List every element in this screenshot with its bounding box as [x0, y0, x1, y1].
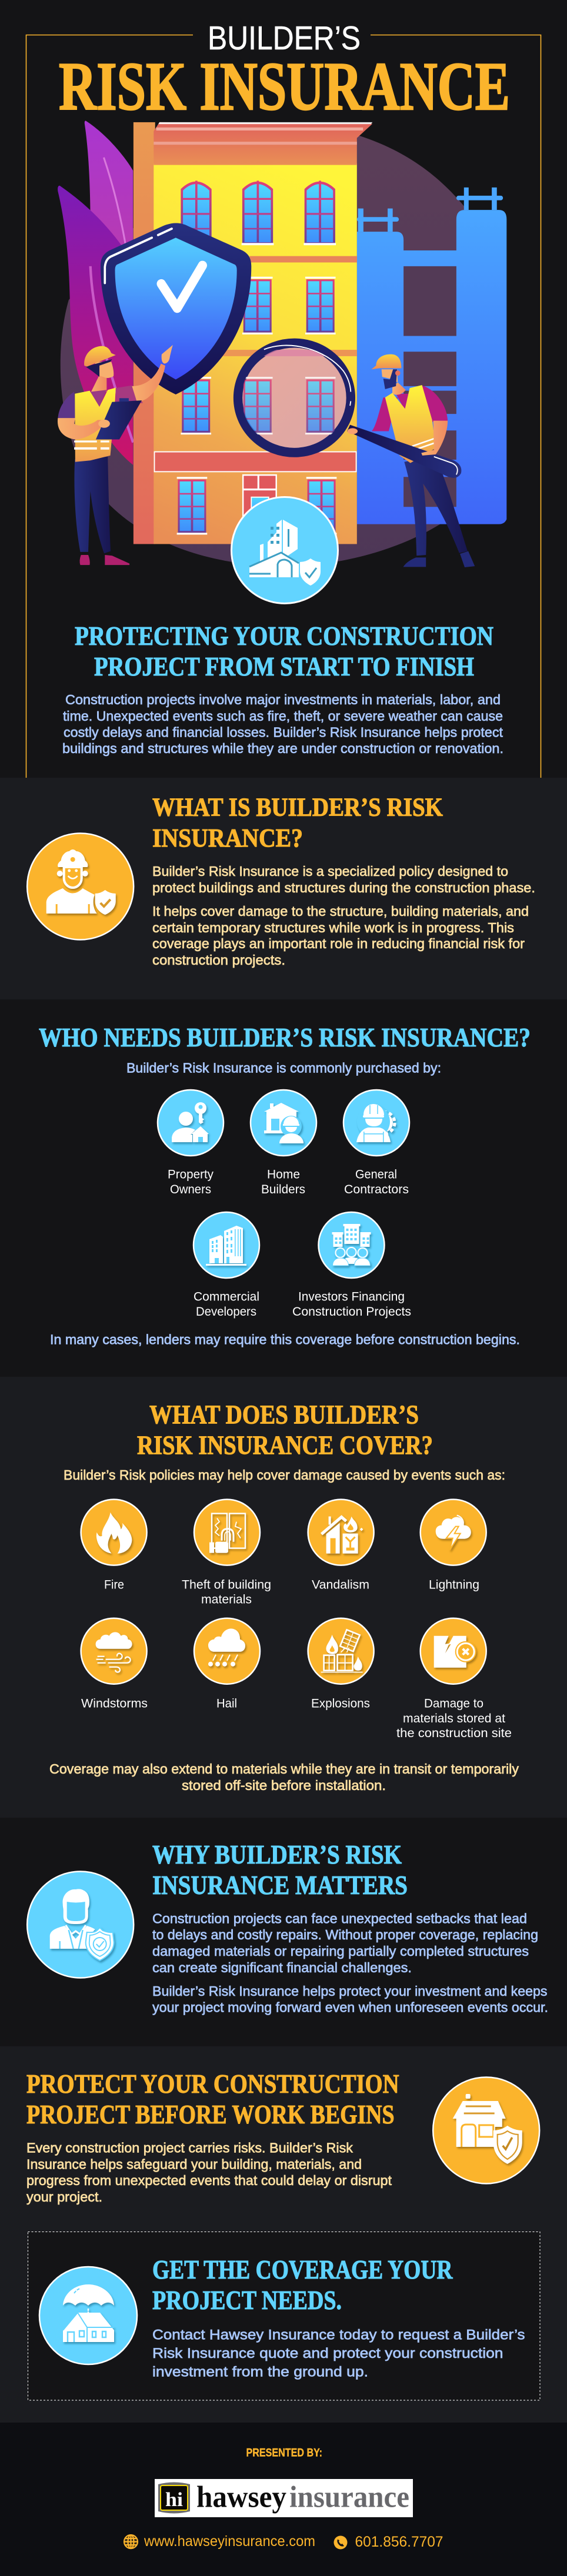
heading: protect your construction project: PROTECT YOUR CONSTRUCTION — [26, 2069, 399, 2099]
text block: intro: buildings and structures while they are under construction or renovation. — [62, 741, 503, 756]
logo: hawsey insurance — [155, 2479, 413, 2517]
label — [182, 1578, 271, 1606]
title — [59, 19, 510, 125]
text block: what is: certain temporary structures while work is in progress. This — [152, 920, 514, 935]
text block: every project — [26, 2140, 392, 2204]
logo mark — [158, 2482, 190, 2514]
logo wordmark: insurance — [289, 2481, 409, 2514]
logo mark: hi — [165, 2489, 183, 2511]
text block: lenders note: In many cases, lenders may require this coverage before construction begins. — [50, 1332, 520, 1347]
item: fire — [81, 1500, 147, 1592]
label: Damage to — [424, 1697, 483, 1711]
label: Developers — [196, 1304, 256, 1319]
label: Owners — [170, 1182, 211, 1196]
item: theft — [182, 1500, 271, 1606]
label: Investors Financing — [298, 1290, 405, 1304]
label — [261, 1167, 305, 1196]
text block: contact — [152, 2327, 525, 2380]
text block: why it matters — [152, 1911, 548, 2015]
leaves — [58, 121, 133, 465]
label: Construction Projects — [292, 1304, 411, 1319]
label: Commercial — [194, 1290, 259, 1304]
heading: what is builder's risk insurance: WHAT IS BUILDER’S RISK — [152, 792, 443, 822]
label: Hail — [216, 1697, 237, 1711]
text block: intro: time. Unexpected events such as fire, theft, or severe weather can cause — [63, 708, 503, 724]
item: general contractors — [343, 1090, 409, 1196]
heading: what does builder's risk insurance cover — [137, 1399, 433, 1460]
text block: coverage extends — [49, 1761, 519, 1793]
item: property owners — [158, 1090, 224, 1196]
text block: intro: costly delays and financial losses. Builder’s Risk Insurance helps protect — [64, 724, 503, 740]
label — [396, 1697, 512, 1740]
heading: protecting your construction project: PROJECT FROM START TO FINISH — [94, 651, 474, 681]
text block: why it matters: your project moving forward even when unforeseen events occur. — [152, 2000, 548, 2015]
label — [168, 1167, 214, 1196]
heading: get the coverage — [152, 2254, 453, 2315]
heading: protect your construction project: PROJECT BEFORE WORK BEGINS — [26, 2099, 394, 2129]
item: lightning — [421, 1500, 486, 1592]
logo wordmark — [196, 2481, 409, 2514]
panel: what is background — [0, 778, 567, 999]
text block: contact: investment from the ground up. — [152, 2364, 368, 2380]
text block: every project: Insurance helps safeguard your building, materials, and — [26, 2156, 362, 2172]
panel: who needs background — [0, 999, 567, 1377]
text block: why it matters: can create significant financial challenges. — [152, 1960, 412, 1975]
icon: buildings and people — [319, 1212, 385, 1278]
label — [344, 1167, 409, 1196]
text block: coverage extends: Coverage may also extend to materials while they are in transit or temporarily — [49, 1761, 519, 1777]
presented by label: PRESENTED BY: — [246, 2447, 322, 2459]
heading: what is builder's risk insurance — [152, 792, 443, 852]
label: Lightning — [429, 1578, 479, 1592]
building — [134, 122, 372, 544]
icon: office buildings — [194, 1212, 259, 1278]
text block: intro — [62, 692, 503, 756]
heading: what does builder's risk insurance cover: WHAT DOES BUILDER’S — [149, 1399, 419, 1429]
worker right — [347, 354, 475, 567]
text block: what is: protect buildings and structures during the construction phase. — [152, 880, 535, 895]
label — [292, 1290, 411, 1319]
icon: professional with shield — [27, 1872, 134, 1978]
heading: get the coverage: PROJECT NEEDS. — [152, 2285, 342, 2315]
hero illustration — [58, 121, 506, 567]
item: commercial developers — [194, 1212, 259, 1319]
panel: intro background — [0, 0, 567, 778]
label: Property — [168, 1167, 214, 1182]
website: www.hawseyinsurance.com — [144, 2533, 315, 2550]
text block: why it matters: damaged materials or repairing partially completed structures — [152, 1943, 529, 1959]
label: Builders — [261, 1182, 305, 1196]
item: vandalism — [308, 1500, 374, 1592]
icon: damaged material panel — [421, 1618, 486, 1684]
heading: why builder's risk insurance matters: WHY BUILDER’S RISK — [152, 1839, 402, 1869]
icon: hand breaking window — [194, 1500, 260, 1565]
text block: coverage extends: stored off-site before installation. — [182, 1778, 386, 1793]
text block: every project: Every construction project carries risks. Builder’s Risk — [26, 2140, 353, 2156]
panel: get the coverage callout — [28, 2232, 540, 2400]
panel: why it matters background — [0, 1818, 567, 2046]
panel: protect background — [0, 2046, 567, 2423]
title frame — [26, 35, 541, 778]
panel: what does it cover background — [0, 1377, 567, 1818]
text block: every project: progress from unexpected events that could delay or disrupt — [26, 2173, 392, 2188]
heading: what is builder's risk insurance: INSURANCE? — [152, 824, 303, 852]
label: materials stored at — [403, 1711, 505, 1725]
magnifying glass lens — [238, 343, 351, 453]
label: Windstorms — [81, 1697, 148, 1711]
label: Explosions — [311, 1697, 370, 1711]
icon: phone — [334, 2536, 347, 2549]
heading: what does builder's risk insurance cover: RISK INSURANCE COVER? — [137, 1430, 433, 1460]
icon: flame — [81, 1500, 147, 1565]
title line: Builder's: BUILDER’S — [208, 19, 361, 57]
text block: what is: construction projects. — [152, 952, 285, 968]
icon: person with key and house — [158, 1090, 224, 1156]
text block: commonly purchased by: Builder’s Risk Insurance is commonly purchased by: — [126, 1060, 441, 1076]
icon: storm cloud with bolt — [421, 1500, 486, 1565]
label: General — [355, 1167, 397, 1182]
logo wordmark: hawsey — [196, 2481, 286, 2514]
phone number: 601.856.7707 — [355, 2534, 443, 2550]
item: explosions — [308, 1618, 374, 1711]
icon: exploding building — [308, 1618, 374, 1684]
label: Fire — [104, 1578, 124, 1592]
text block: events intro: Builder’s Risk policies may help cover damage caused by events such as: — [64, 1467, 505, 1483]
icon: umbrella over house — [39, 2267, 137, 2364]
shield with check — [101, 223, 251, 394]
text block: contact: Contact Hawsey Insurance today to request a Builder’s — [152, 2327, 525, 2343]
label: Vandalism — [312, 1578, 369, 1592]
text block: every project: your project. — [26, 2189, 102, 2204]
item: damage to materials — [396, 1618, 512, 1740]
label: the construction site — [396, 1726, 512, 1740]
icon: house with shield — [433, 2077, 539, 2183]
item: hail — [194, 1618, 260, 1711]
item: investors — [292, 1212, 411, 1319]
text block: why it matters: Construction projects can face unexpected setbacks that lead — [152, 1911, 527, 1926]
heading: protecting your construction project — [75, 621, 493, 681]
heading: why builder's risk insurance matters: INSURANCE MATTERS — [152, 1870, 408, 1900]
icon: contractor with gear — [343, 1090, 409, 1156]
icon: damaged house with flame — [308, 1500, 374, 1565]
label: Contractors — [344, 1182, 409, 1196]
text block: contact: Risk Insurance quote and protect your construction — [152, 2346, 503, 2361]
text block: why it matters: Builder’s Risk Insurance helps protect your investment and keeps — [152, 1983, 547, 1999]
worker left — [58, 345, 173, 565]
icon: worker with shield — [27, 834, 134, 939]
icon: globe — [124, 2535, 138, 2548]
label: materials — [201, 1592, 252, 1606]
text block: intro: Construction projects involve major investments in materials, labor, and — [65, 692, 501, 707]
heading: protecting your construction project: PROTECTING YOUR CONSTRUCTION — [75, 621, 493, 651]
text block: what is: coverage plays an important role in reducing financial risk for — [152, 936, 525, 951]
label — [194, 1290, 259, 1319]
text block: why it matters: to delays and costly repairs. Without proper coverage, replacing — [152, 1927, 538, 1942]
icon: hero badge buildings with shield — [232, 497, 338, 603]
heading: protect your construction project — [26, 2069, 399, 2129]
background blob — [61, 135, 506, 566]
label: Home — [267, 1167, 300, 1182]
heading: get the coverage: GET THE COVERAGE YOUR — [152, 2254, 453, 2284]
text block: what is — [152, 864, 535, 968]
text block: what is: It helps cover damage to the structure, building materials, and — [152, 904, 529, 919]
icon: house and builder — [251, 1090, 316, 1156]
scaffold towers — [357, 188, 506, 524]
contact row — [124, 2533, 443, 2550]
icon: cloud with hail — [194, 1618, 260, 1684]
panel: footer background — [0, 2423, 567, 2576]
item: home builders — [251, 1090, 316, 1196]
heading: why builder's risk insurance matters — [152, 1839, 408, 1900]
item: windstorms — [81, 1618, 148, 1711]
label: Theft of building — [182, 1578, 271, 1592]
icon: cloud and wind — [81, 1618, 147, 1684]
text block: what is: Builder’s Risk Insurance is a specialized policy designed to — [152, 864, 508, 879]
